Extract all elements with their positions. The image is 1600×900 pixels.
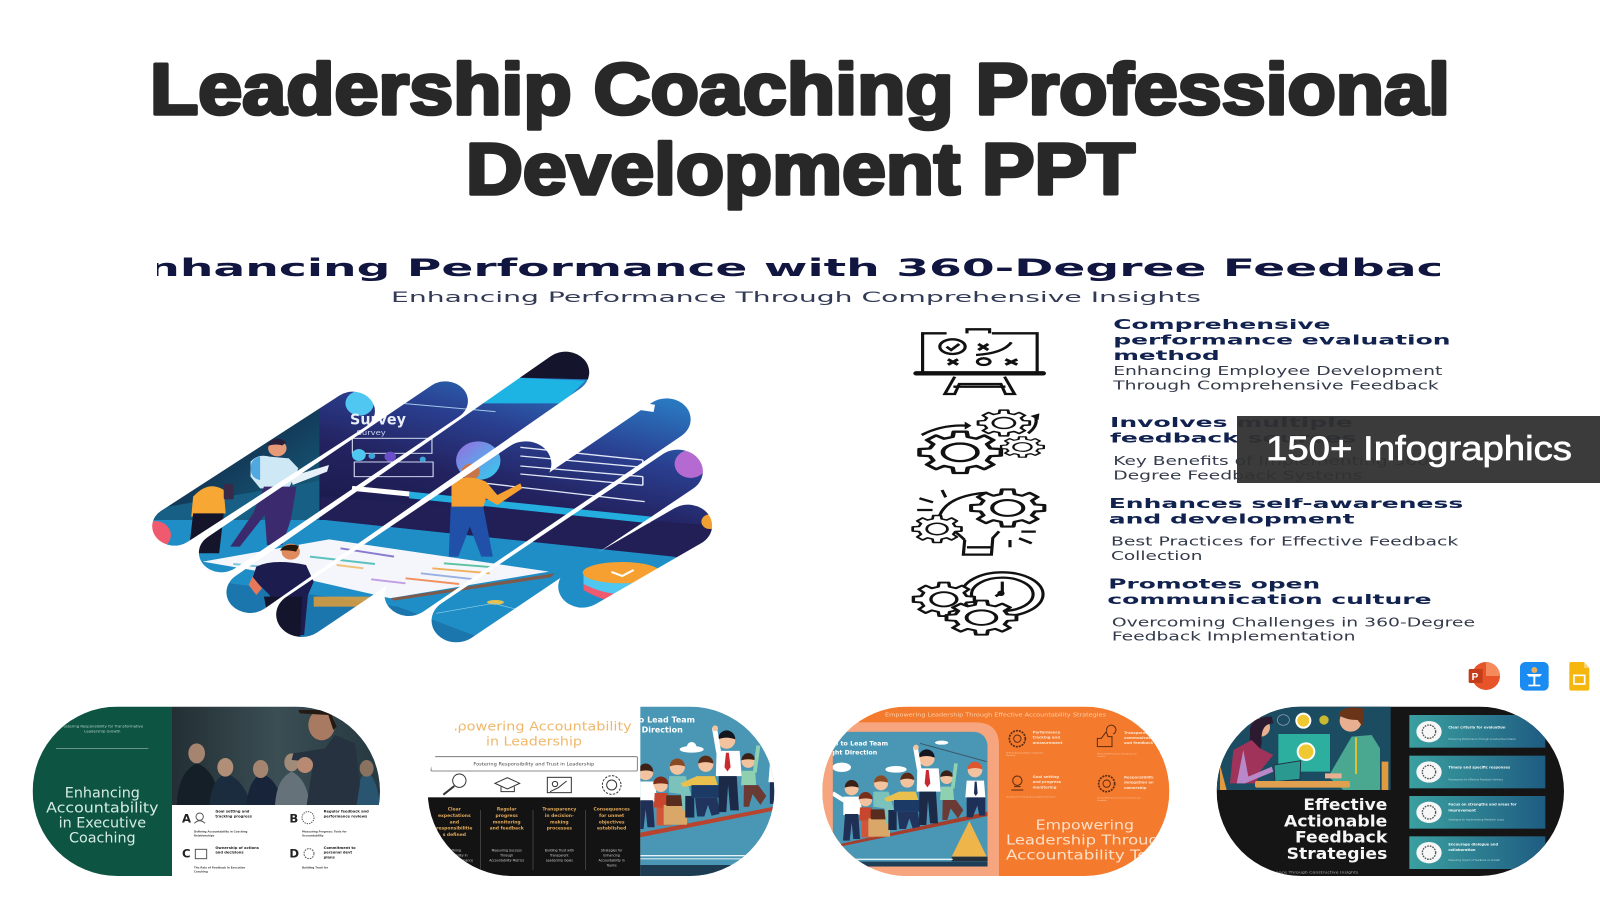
- thumbnail: accountability in leadership: Fostering Responsibility and Trust in Leadership: [473, 762, 594, 768]
- feature text: Goal setting: [1033, 774, 1059, 779]
- thumbnail: empowering leadership: Measuring Performance: Key Metrics for: [1097, 753, 1137, 756]
- A B C D items: A: [182, 811, 191, 825]
- item 1 text: Comprehensive: [1113, 316, 1331, 332]
- icon: PowerPoint: P: [1472, 672, 1479, 683]
- team illustration: to Lead Team: [635, 716, 695, 725]
- feedback cards: Frameworks for Effective Feedback Delivery: [1448, 778, 1503, 782]
- item 1 text: performance evaluation: [1113, 332, 1451, 348]
- A B C D items: Relationships: [194, 834, 215, 838]
- item 4 text: Feedback Implementation: [1112, 631, 1355, 644]
- item 1 text: Through Comprehensive Feedback: [1112, 379, 1440, 393]
- black columns: [436, 807, 630, 838]
- man in orange sweater: [449, 464, 522, 557]
- A B C D items: Ownership of actions: [215, 846, 259, 850]
- title text: Feedback: [1295, 828, 1389, 847]
- thumbnail: executive coaching: Fostering Responsibility for Transformative: [61, 724, 144, 729]
- feature text: and progress: [1033, 779, 1062, 784]
- thumbnail: empowering leadership: Defining Accountability in Leadership: [1006, 752, 1044, 755]
- feature text: Performance: [1033, 729, 1061, 734]
- thumbnail: feedback strategies: [1217, 707, 1564, 876]
- A B C D items: Regular feedback and: [324, 810, 369, 814]
- feature text: Responsibility: [1124, 775, 1155, 780]
- feature text: ownership: [1124, 785, 1147, 790]
- A B C D items: D: [289, 846, 299, 860]
- thumbnail: accountability in leadership: Defining: [448, 849, 461, 853]
- black columns: and: [450, 819, 459, 825]
- feedback cards: Focus on strengths and areas for: [1448, 803, 1517, 807]
- thumbnail: empowering leadership: Building Trust Through Accountability Framework: [1007, 796, 1056, 799]
- feedback cards: Clear criteria for evaluation: [1448, 725, 1506, 729]
- thumbnail: executive coaching: [33, 707, 380, 876]
- item 4 text: Promotes open: [1108, 576, 1320, 592]
- A B C D items: personal devt: [324, 851, 352, 855]
- team illustration: t Direction: [635, 726, 683, 735]
- thumbnail: accountability in leadership: Teams: [606, 864, 617, 868]
- title: [150, 50, 1450, 210]
- item 2 text: feedback sources: [1110, 430, 1356, 446]
- feature text: measurement: [1033, 740, 1063, 745]
- woman in orange: [189, 484, 234, 553]
- feedback cards: improvement: [1448, 808, 1476, 812]
- A B C D items: B: [289, 811, 298, 825]
- item 4 text: communication culture: [1107, 591, 1432, 607]
- A B C D items: Commitment to: [324, 846, 356, 850]
- A B C D items: C: [182, 846, 191, 860]
- feature text: monitoring: [1033, 784, 1057, 789]
- item 3 text: Best Practices for Effective Feedback: [1111, 536, 1459, 549]
- item 2 text: Key Benefits of Implementing 360-: [1113, 455, 1436, 468]
- title text: [46, 785, 159, 847]
- A B C D items: Defining Accountability in Coaching: [194, 830, 247, 834]
- thumbnail: accountability in leadership: Transparent: [549, 854, 569, 858]
- striped illustration: survey team: Survey: [357, 428, 386, 437]
- man with backpack: [230, 439, 329, 547]
- banner: 150+ infographics: 150+ Infographics: [1266, 430, 1572, 468]
- striped illustration: survey team: [152, 352, 712, 642]
- icon: light bulb with gears: [913, 489, 1044, 555]
- title text: [1284, 795, 1389, 863]
- icon: gears with arrows: [920, 410, 1044, 473]
- A B C D items: Measuring Progress: Tools for: [302, 830, 347, 834]
- slide heading: Enhancing Performance with 360-Degree Feedback: [114, 254, 1478, 282]
- icon: clock with gears: [913, 572, 1043, 635]
- item 3 text: [1109, 495, 1463, 563]
- item 3 text: Collection: [1111, 550, 1202, 563]
- item 3 text: Enhances self-awareness: [1109, 495, 1463, 511]
- black columns: responsibilitie: [436, 826, 472, 832]
- small icons: [443, 774, 621, 795]
- title text: Coaching: [69, 831, 136, 847]
- item 4 text: Overcoming Challenges in 360-Degree: [1112, 617, 1475, 630]
- item 1 text: method: [1113, 347, 1220, 363]
- thumbnail: accountability in leadership: Accountability Metrics: [489, 859, 524, 863]
- title: Development PPT: [466, 130, 1135, 210]
- feature text: and feedback: [1124, 740, 1154, 745]
- thumbnail: accountability in leadership: Leadership Goals: [546, 859, 573, 863]
- thumbnail: accountability in leadership: Accountability in: [599, 859, 625, 863]
- item 4 text: [1107, 576, 1475, 644]
- big heading: [1006, 820, 1156, 862]
- document on table: [203, 539, 555, 601]
- thumbnail: empowering leadership: Roadmap: [1006, 755, 1016, 757]
- feedback cards: Measuring Impact of Feedback on Growth: [1448, 858, 1501, 862]
- team illustration: Right Direction: [823, 749, 878, 756]
- icon: strategy board: [916, 329, 1043, 394]
- thumbnail: feedback strategies: Enhancing Performance Through Constructive Insights: [1232, 871, 1359, 875]
- item 1 text: [1112, 316, 1451, 393]
- black columns: making: [550, 819, 569, 825]
- feedback cards: Enhancing Performance Through Constructive Criteria: [1448, 737, 1516, 741]
- A B C D items: plans: [324, 856, 335, 860]
- A B C D items: Building Trust for: [302, 866, 329, 870]
- thumbnail: empowering leadership: Leaders: [1097, 755, 1105, 758]
- thumbnail: empowering leadership: Feedback: [1097, 800, 1108, 802]
- thumbnail: accountability in leadership: Enhancing: [603, 854, 620, 858]
- feedback cards: Encourage dialogue and: [1448, 843, 1498, 847]
- black columns: Consequences: [594, 807, 630, 813]
- thumbnail: accountability in leadership: [428, 707, 790, 876]
- feedback cards: Strategies for Implementing Feedback Loops: [1448, 818, 1505, 822]
- thumbnail: accountability in leadership: Through: [499, 854, 513, 858]
- striped illustration: survey team: Survey: [350, 411, 406, 428]
- header text: in Leadership: [486, 734, 582, 749]
- header text: [455, 721, 632, 748]
- thumbnail: accountability in leadership: Leadership Governance: [436, 859, 473, 863]
- feedback cards: collaboration: [1448, 848, 1476, 852]
- item 2 text: Involves multiple: [1110, 414, 1353, 430]
- item 2 text: Degree Feedback Systems: [1113, 469, 1362, 483]
- icons: [1009, 725, 1116, 792]
- thumbnail: empowering leadership: Driving Effective Team Communication and: [1097, 797, 1141, 800]
- title text: Enhancing: [65, 785, 140, 801]
- A B C D items: Accountability: [302, 834, 324, 838]
- feature text: Transparent: [1124, 730, 1150, 735]
- thumbnail: accountability in leadership: Accountability in: [441, 854, 467, 858]
- A B C D items: [182, 810, 369, 873]
- title text: Actionable: [1284, 811, 1387, 830]
- title: Leadership Coaching Professional: [150, 50, 1450, 130]
- thumbnail: executive coaching: Leadership Growth: [84, 728, 121, 733]
- icon: Google Slides: [1569, 662, 1589, 691]
- item 3 text: and development: [1109, 511, 1355, 527]
- big heading: Accountability To: [1006, 848, 1148, 864]
- icon: Keynote: [1520, 662, 1549, 691]
- feature text: delegation and: [1124, 780, 1157, 785]
- black columns: objectives: [599, 819, 625, 825]
- thumbnail: empowering leadership: Empowering Leadership Through Effective Accountability Strategies: [885, 712, 1106, 718]
- black columns: for unmet: [599, 813, 625, 819]
- black columns: Transparency: [542, 807, 576, 813]
- black columns: and feedback: [490, 826, 525, 832]
- feature text: [1033, 729, 1157, 790]
- thumbnail: accountability in leadership: Building Trust with: [545, 849, 574, 853]
- title text: Strategies: [1287, 844, 1387, 863]
- black columns: in decision-: [545, 813, 574, 819]
- feature text: communication: [1124, 735, 1157, 740]
- feedback cards: Timely and specific responses: [1448, 766, 1510, 770]
- title text: Effective: [1303, 795, 1387, 814]
- feedback cards: [1409, 715, 1545, 869]
- A B C D items: performance reviews: [324, 815, 367, 819]
- banner: 150+ infographics: [1237, 416, 1600, 483]
- illustration: two people talking: [1220, 707, 1388, 790]
- feature text: tracking and: [1033, 735, 1060, 740]
- A B C D items: Coaching: [194, 869, 208, 873]
- A B C D items: The Role of Feedback in Executive: [194, 865, 245, 869]
- black columns: s defined: [443, 832, 466, 838]
- black columns: Clear: [448, 807, 462, 813]
- team illustration: [823, 732, 988, 867]
- slide subtitle: Enhancing Performance Through Comprehensive Insights: [391, 290, 1201, 306]
- thumbnail: accountability in leadership: Strategies for: [601, 849, 623, 853]
- A B C D items: and decisions: [215, 851, 244, 855]
- title text: Accountability: [46, 801, 159, 817]
- title text: in Executive: [59, 816, 146, 832]
- team illustration: [640, 716, 774, 865]
- thumbnail: accountability in leadership: Measuring Success: [492, 849, 522, 853]
- black columns: established: [597, 826, 626, 832]
- A B C D items: tracking progress: [215, 815, 252, 819]
- header text: Empowering Accountability: [434, 719, 632, 734]
- black columns: expectations: [438, 813, 471, 819]
- foreground man: [249, 544, 314, 637]
- item 1 text: Enhancing Employee Development: [1113, 365, 1443, 378]
- black columns: progress: [496, 813, 518, 819]
- format icons: [1469, 662, 1589, 691]
- black columns: processes: [547, 826, 572, 832]
- A B C D items: Goal setting and: [215, 810, 250, 814]
- black columns: Regular: [497, 807, 517, 813]
- big heading: Empowering: [1036, 817, 1134, 833]
- team illustration: ship to Lead Team: [823, 741, 888, 748]
- coin stack: [583, 562, 661, 602]
- big heading: Leadership Through: [1006, 832, 1169, 848]
- thumbnail: empowering leadership: [822, 707, 1169, 876]
- black columns: monitoring: [493, 819, 521, 825]
- item 2 text: [1110, 414, 1436, 483]
- photo people: [177, 710, 380, 805]
- list: feedback benefits: [913, 316, 1475, 644]
